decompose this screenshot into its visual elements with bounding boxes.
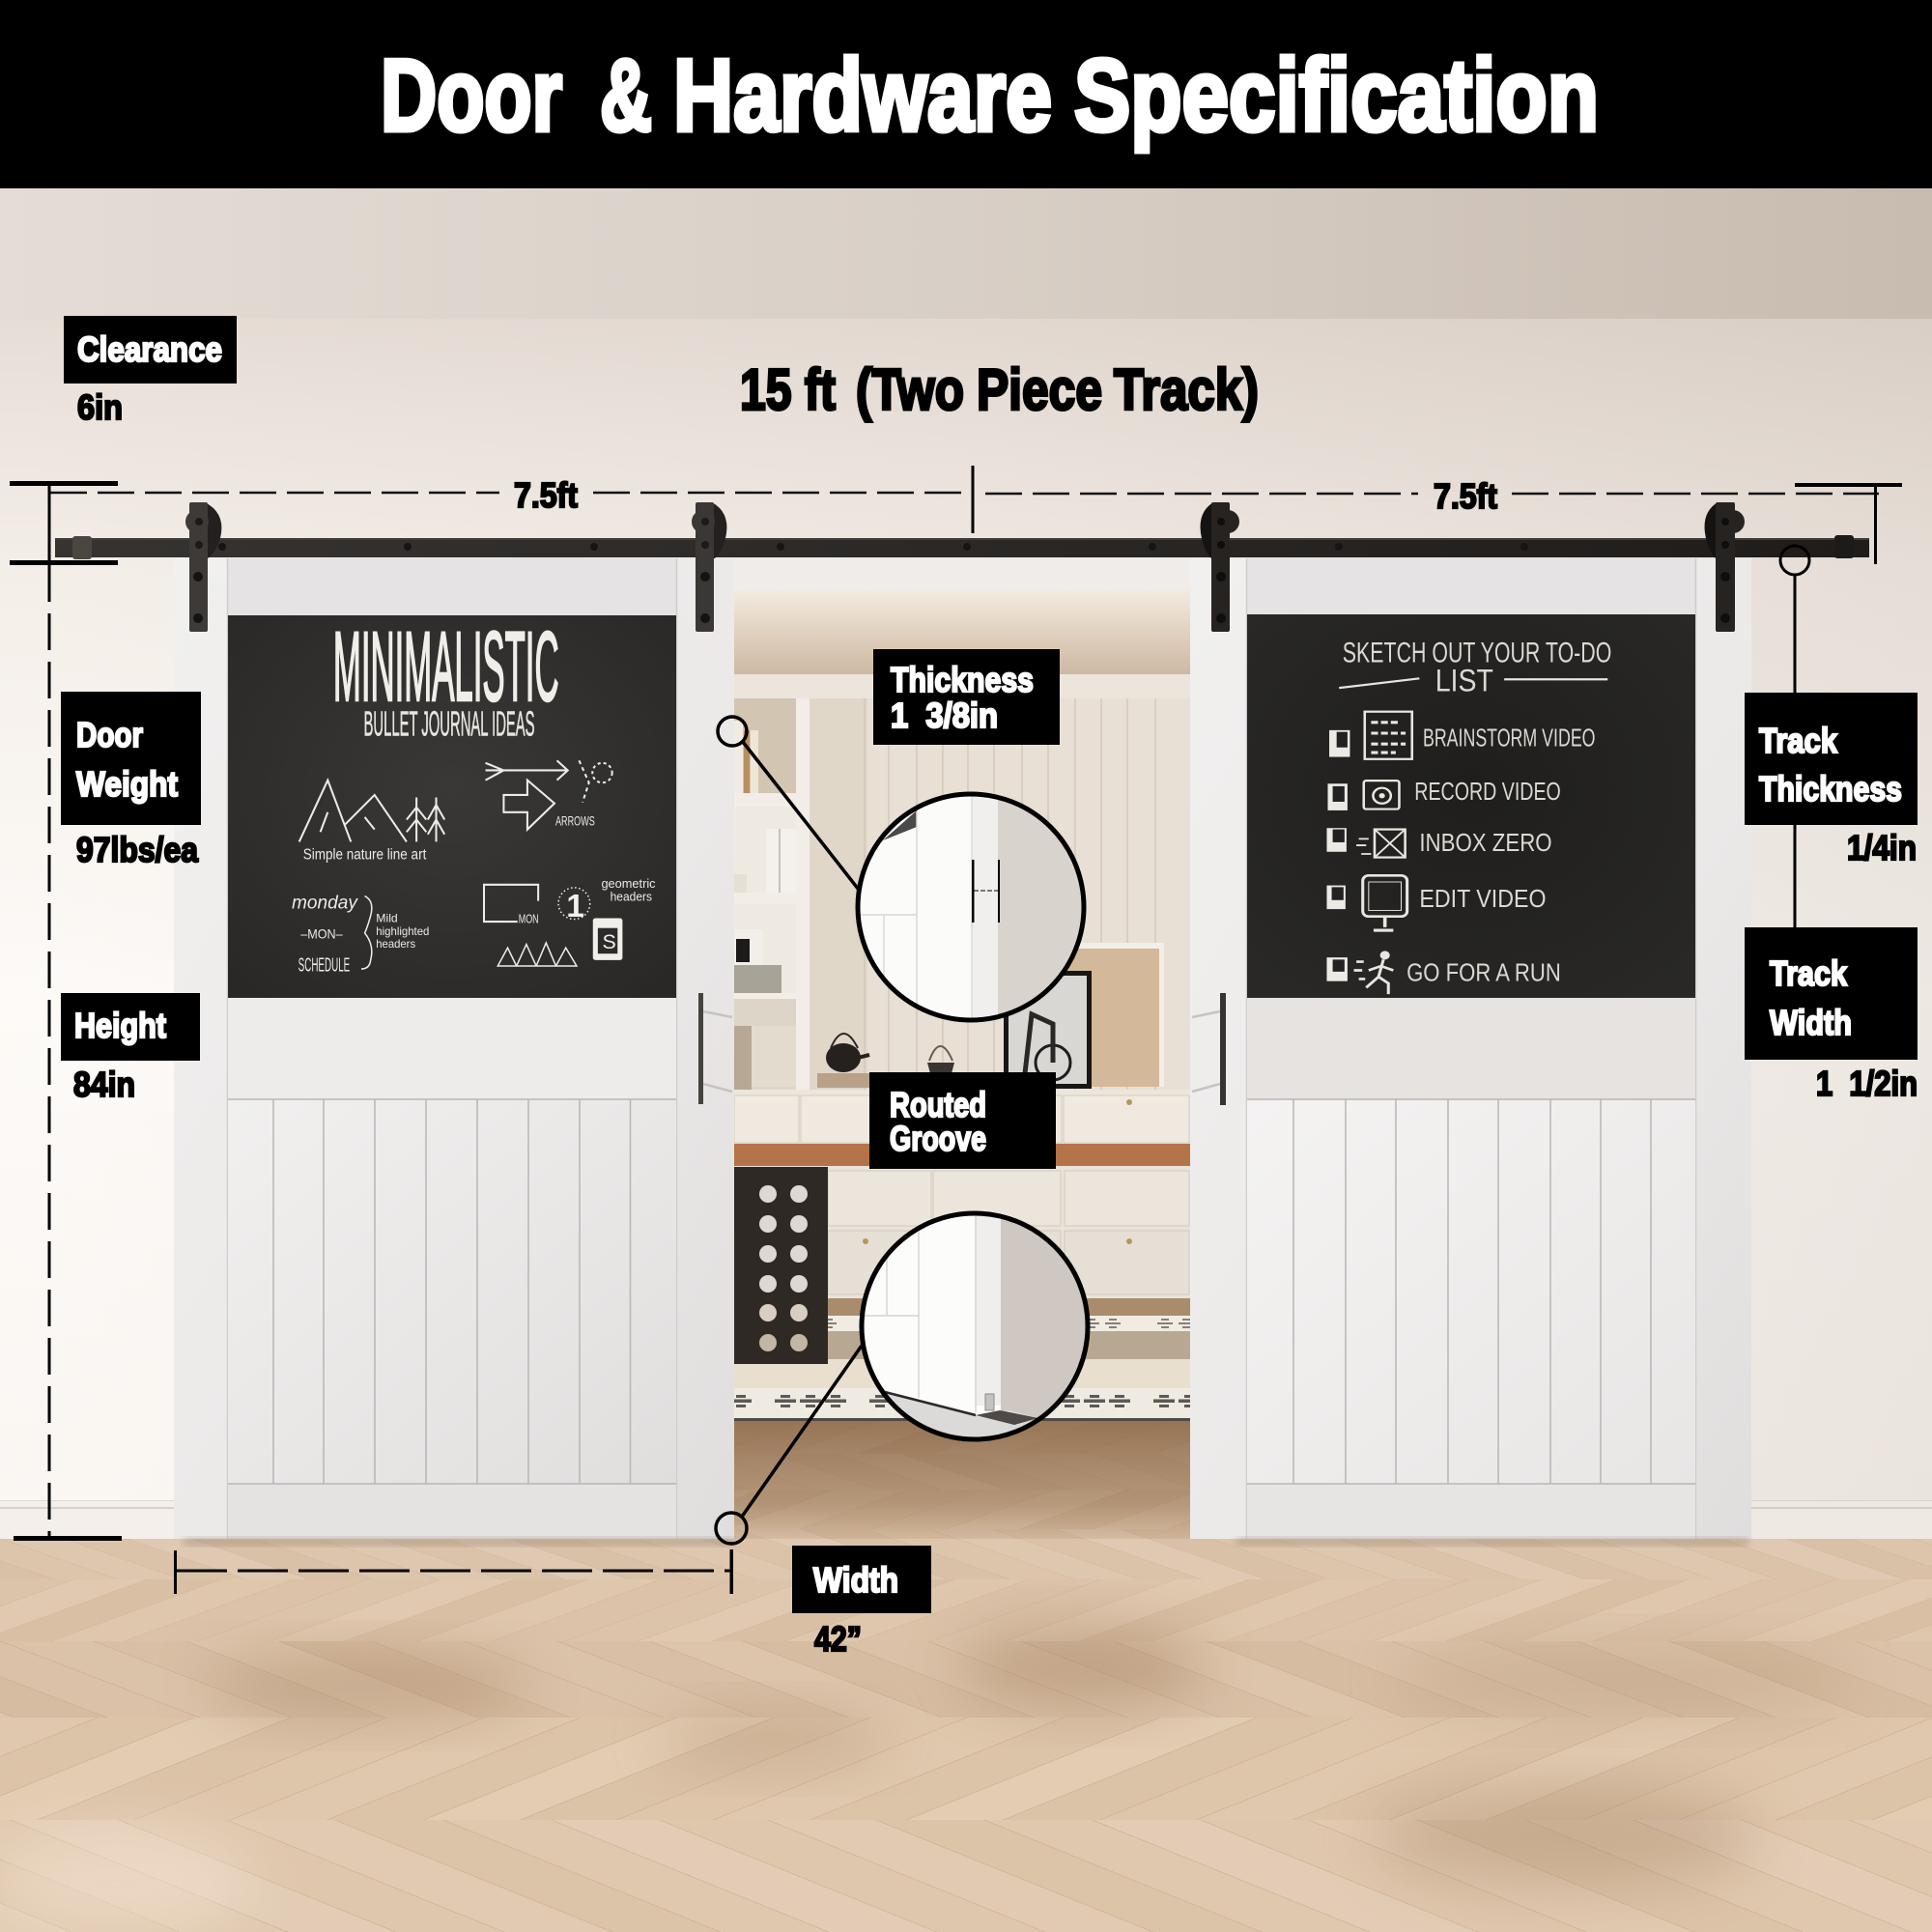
floor xyxy=(0,1536,1932,1932)
right door xyxy=(1190,558,1751,1545)
list item: brainstorm video xyxy=(1329,712,1596,759)
chalkboard: minimalistic bullet journal: BULLET JOURNAL IDEAS xyxy=(364,705,535,744)
track length heading: (Two xyxy=(856,357,964,422)
label: track width: Width xyxy=(1770,1003,1852,1042)
thickness marker xyxy=(972,860,1000,923)
clearance bracket xyxy=(10,481,118,565)
list item: record video xyxy=(1327,778,1561,810)
teapots xyxy=(817,1034,956,1088)
label: height: 84in xyxy=(73,1065,135,1104)
hanger 1 xyxy=(185,502,221,632)
label: width: 42” xyxy=(814,1619,862,1659)
schedule doodle: Mild xyxy=(376,912,398,925)
geometric headers doodle: geometric xyxy=(601,876,656,891)
track length heading: Track) xyxy=(1114,357,1259,422)
schedule doodle xyxy=(292,892,430,977)
list item: brainstorm video: BRAINSTORM VIDEO xyxy=(1423,724,1596,752)
left door handle xyxy=(698,993,732,1104)
hanger 2 xyxy=(692,502,726,632)
label: track width: 1 1/2in xyxy=(1816,1064,1918,1103)
desk leg with holes xyxy=(734,1167,828,1364)
label: height xyxy=(61,993,200,1104)
track length heading: 15 ft xyxy=(740,357,836,422)
title xyxy=(381,39,1599,153)
routed groove callout marker and line xyxy=(716,1346,862,1544)
magnifier: door thickness detail xyxy=(855,792,1087,1024)
schedule doodle: highlighted xyxy=(376,924,430,938)
title: Hardware xyxy=(673,39,1052,153)
door height dimension xyxy=(14,565,122,1541)
title: Specification xyxy=(1074,39,1599,153)
hanger 4 xyxy=(1705,502,1745,632)
track span dimension: left half: 7.5ft xyxy=(514,475,578,515)
label: thickness xyxy=(873,649,1060,745)
geometric headers doodle: MON xyxy=(519,912,539,926)
track callout line and marker xyxy=(1780,546,1809,927)
geometric headers doodle: headers xyxy=(611,890,652,904)
label: thickness: Thickness xyxy=(891,660,1034,699)
list item: go for a run: GO FOR A RUN xyxy=(1406,958,1561,986)
label: width: Width xyxy=(813,1560,898,1600)
label: track thickness: 1/4in xyxy=(1847,828,1917,867)
left door xyxy=(174,558,734,1545)
schedule doodle: headers xyxy=(376,937,415,951)
shelving unit xyxy=(734,698,810,1090)
label: track thickness: Thickness xyxy=(1759,769,1902,809)
beadboard back wall xyxy=(810,698,1190,1090)
door width dimension xyxy=(174,1549,733,1594)
label: routed groove: Groove xyxy=(890,1119,986,1158)
title: Door xyxy=(381,39,562,153)
list item: record video: RECORD VIDEO xyxy=(1414,778,1561,806)
geometric headers doodle xyxy=(484,876,656,966)
room floor and rug xyxy=(734,1298,1190,1539)
arrows doodle xyxy=(486,760,612,830)
label: track thickness: Track xyxy=(1759,721,1838,760)
label: track width: Track xyxy=(1770,953,1848,993)
track length heading: Piece xyxy=(977,357,1102,422)
label: door weight: Weight xyxy=(76,764,178,804)
arrows doodle: ARROWS xyxy=(555,814,595,829)
hanger 3 xyxy=(1201,502,1239,632)
to-do heading: SKETCH OUT YOUR TO-DO xyxy=(1343,636,1611,668)
label: door weight: 97lbs/ea xyxy=(76,830,199,869)
header bar xyxy=(0,0,1932,188)
label: width xyxy=(792,1546,931,1659)
track length heading xyxy=(740,357,1259,422)
label: routed groove xyxy=(869,1072,1056,1169)
track span dimension: right half: 7.5ft xyxy=(1434,476,1497,516)
cabinets and desk xyxy=(734,1090,1190,1298)
thickness callout marker and line xyxy=(718,717,859,890)
list item: inbox zero xyxy=(1326,828,1552,858)
wall and ceiling background xyxy=(0,188,1932,1539)
label: thickness: 1 3/8in xyxy=(891,696,998,735)
schedule doodle: –MON– xyxy=(300,926,343,942)
label: door weight xyxy=(61,692,201,869)
list item: edit video xyxy=(1326,875,1547,930)
chalkboard: minimalistic bullet journal xyxy=(228,611,676,998)
label: track width xyxy=(1745,927,1918,1103)
label: track thickness xyxy=(1745,693,1918,867)
barn door track xyxy=(55,535,1869,559)
chalkboard: minimalistic bullet journal: MINIMALISTIC xyxy=(333,611,559,722)
label: door weight: Door xyxy=(76,715,143,754)
geometric headers doodle: 1 xyxy=(566,889,584,924)
chalkboard: to-do list xyxy=(1247,614,1695,998)
right track bracket xyxy=(1795,483,1902,564)
label: clearance: 6in xyxy=(77,387,123,427)
nature doodle xyxy=(299,781,444,863)
board heading xyxy=(333,611,559,744)
label: clearance: Clearance xyxy=(77,329,222,369)
to-do heading: LIST xyxy=(1435,665,1493,698)
geometric headers doodle: S xyxy=(602,930,616,953)
list item: edit video: EDIT VIDEO xyxy=(1419,885,1547,912)
artwork and photo xyxy=(1004,943,1164,1089)
schedule doodle: monday xyxy=(292,892,358,913)
nature doodle: Simple nature line art xyxy=(303,846,427,863)
label: clearance xyxy=(64,316,237,427)
to-do heading xyxy=(1339,636,1611,698)
room seen through opening xyxy=(734,558,1190,1539)
list item: inbox zero: INBOX ZERO xyxy=(1419,829,1552,856)
list item: go for a run xyxy=(1326,951,1561,994)
title: & xyxy=(600,39,652,153)
schedule doodle: SCHEDULE xyxy=(298,955,350,977)
label: height: Height xyxy=(74,1006,166,1045)
right door handle xyxy=(1192,993,1226,1105)
magnifier: routed groove detail xyxy=(855,1208,1097,1449)
label: routed groove: Routed xyxy=(890,1085,986,1124)
centre tick xyxy=(972,466,974,533)
